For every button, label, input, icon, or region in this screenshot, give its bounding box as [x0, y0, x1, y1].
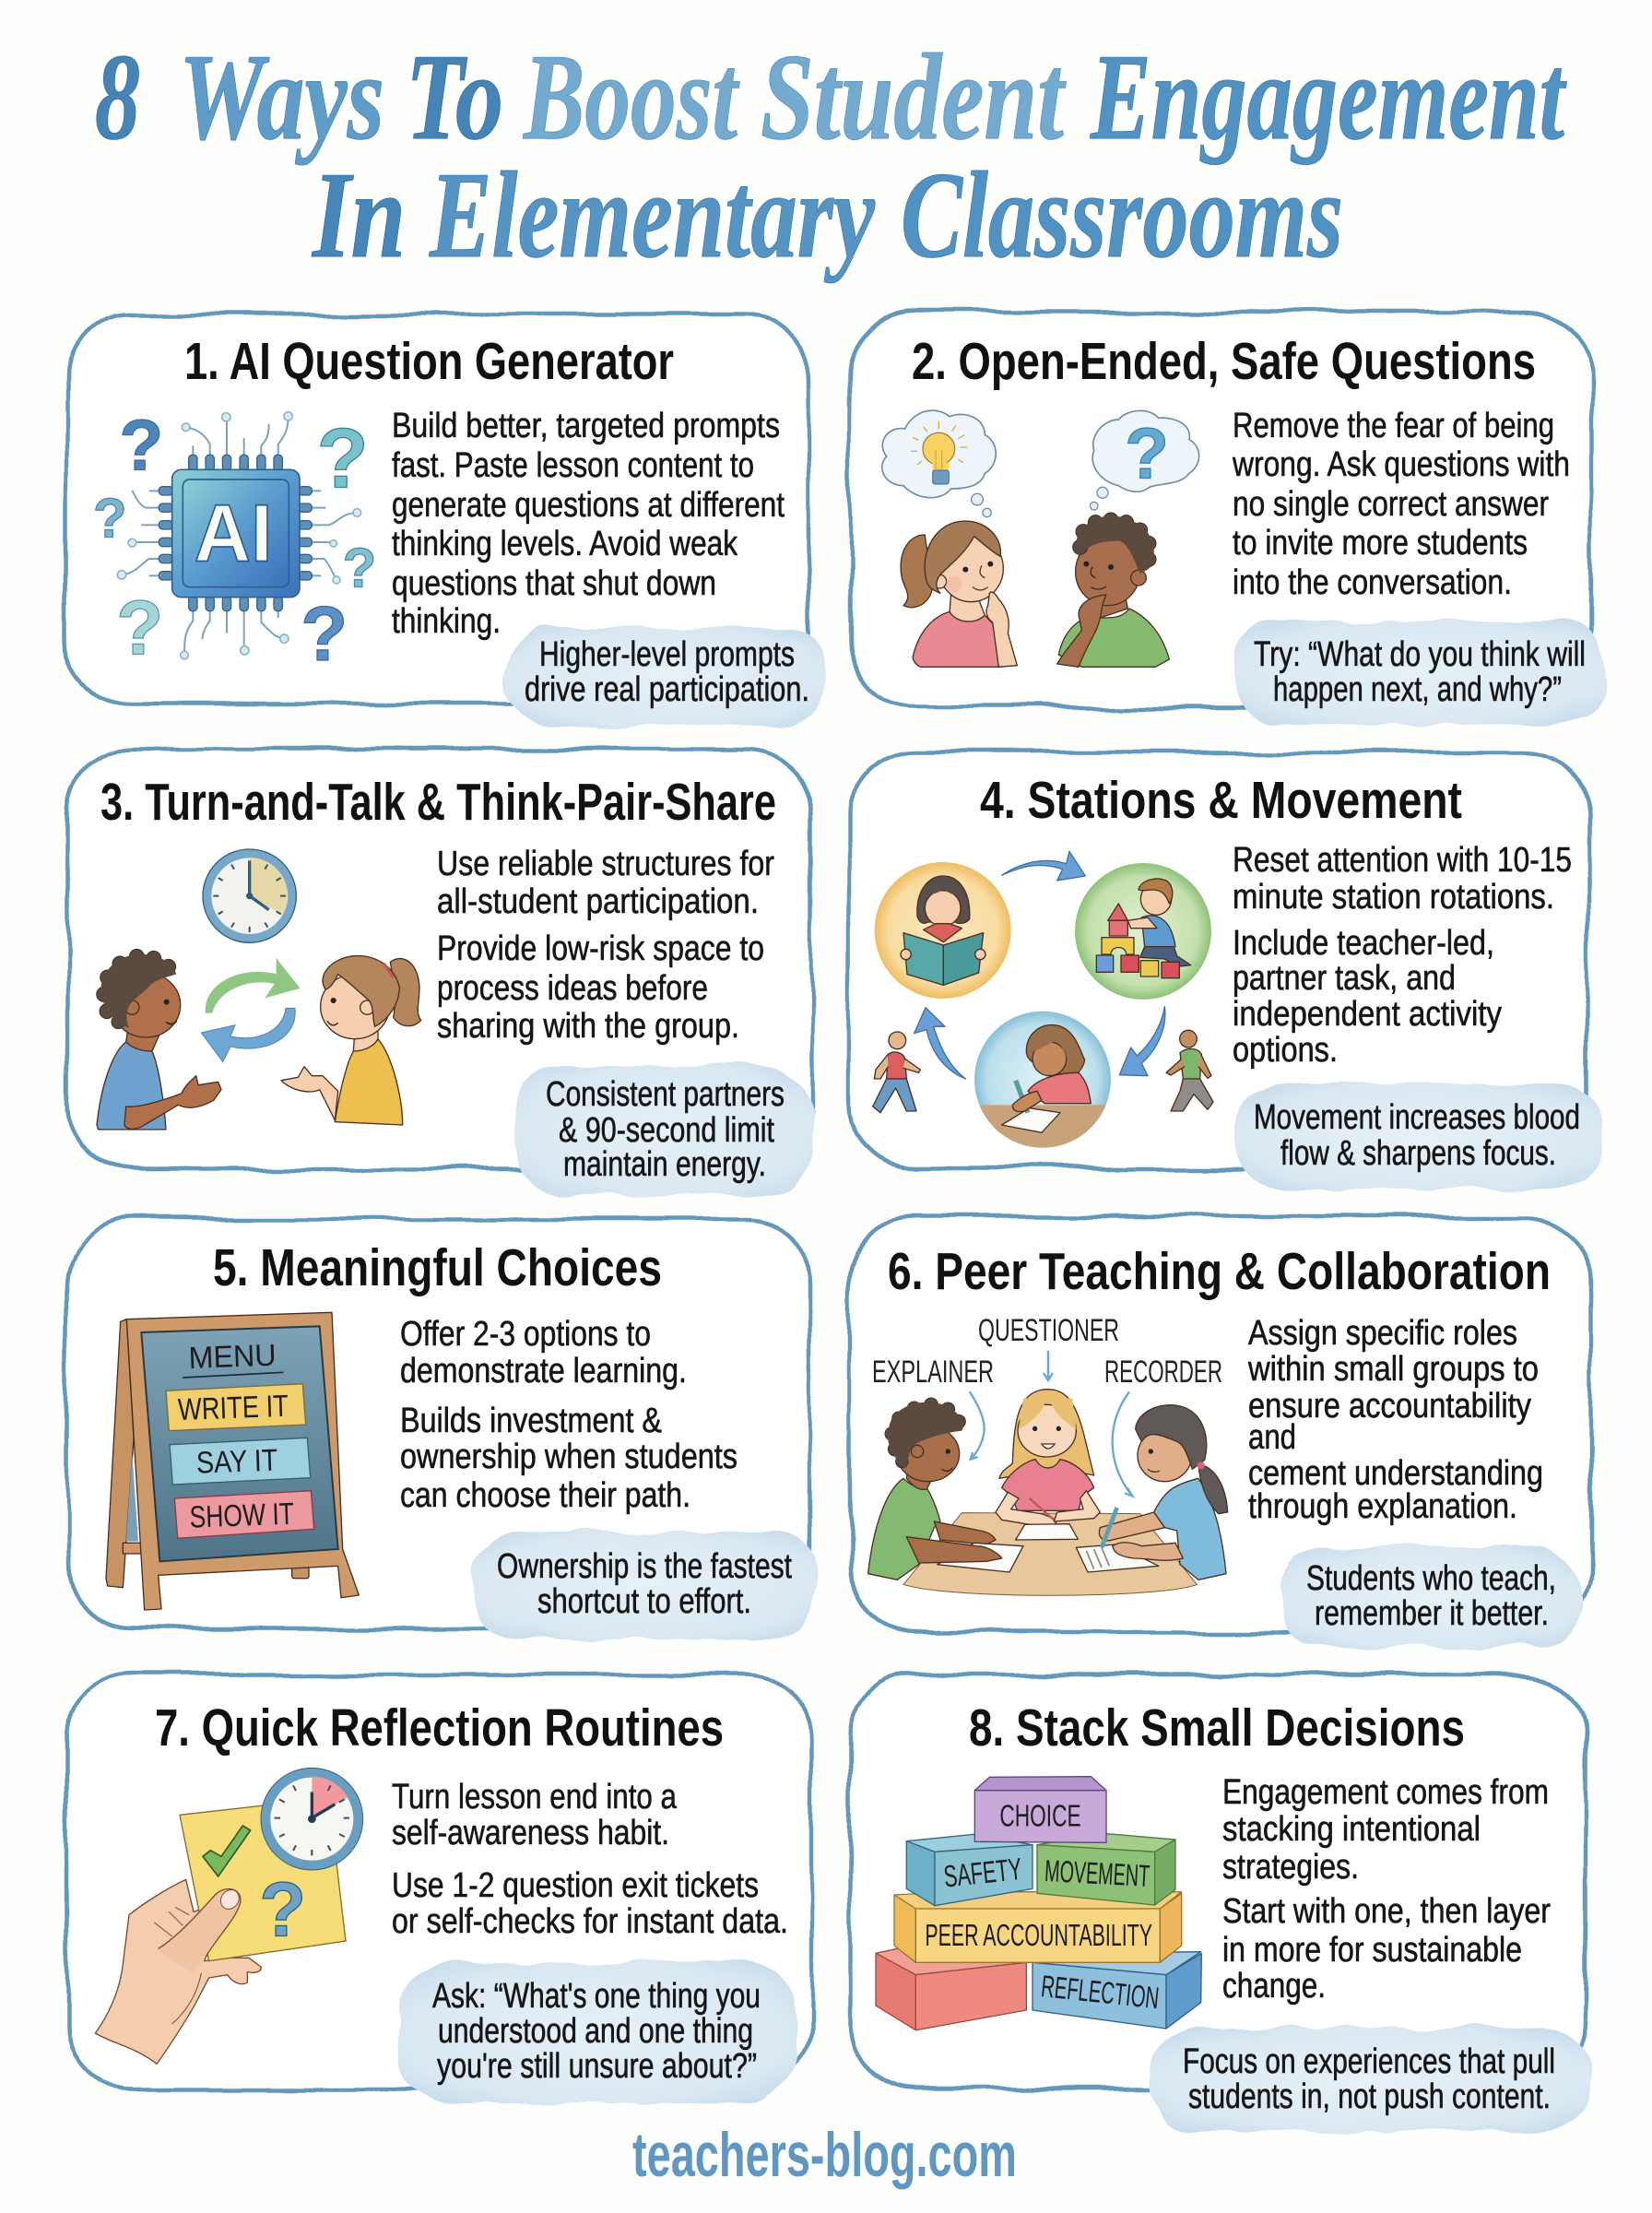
- icon: three students at a table: [868, 1390, 1228, 1595]
- body text: within small groups to: [1247, 1350, 1539, 1389]
- heading: 4. Stations & Movement: [980, 771, 1462, 830]
- icon: clock and two students talking: [97, 849, 421, 1130]
- body text: stacking intentional: [1222, 1810, 1481, 1849]
- body text: [1233, 841, 1572, 1070]
- icon: stacked strategy blocks: CHOICE: [999, 1800, 1081, 1834]
- body text: thinking.: [392, 602, 501, 641]
- callout: Ask: “What's one thing you: [432, 1977, 761, 2016]
- body text: thinking levels. Avoid weak: [392, 525, 738, 563]
- icon: menu easel: MENU: [188, 1339, 277, 1376]
- icon: hand holding exit ticket with timer: ?: [259, 1866, 306, 1952]
- icon: menu easel: SHOW IT: [189, 1497, 295, 1535]
- callout: shortcut to effort.: [537, 1582, 751, 1621]
- callout: flow & sharpens focus.: [1280, 1134, 1556, 1173]
- body text: ownership when students: [400, 1438, 738, 1476]
- body text: minute station rotations.: [1233, 878, 1554, 917]
- body text: no single correct answer: [1233, 485, 1549, 524]
- icon: AI chip with question marks: [93, 404, 376, 677]
- callout: & 90-second limit: [559, 1111, 774, 1150]
- callout: [514, 1065, 813, 1196]
- title: To: [406, 29, 503, 165]
- icon: menu easel: WRITE IT: [177, 1390, 289, 1427]
- heading: 5. Meaningful Choices: [213, 1238, 662, 1297]
- callout: maintain energy.: [563, 1145, 766, 1184]
- icon: AI chip with question marks: ?: [116, 585, 163, 670]
- panel: 6 Peer Teaching & Collaboration: [850, 1217, 1591, 1647]
- body text: sharing with the group.: [437, 1007, 739, 1046]
- body text: [1232, 407, 1570, 602]
- body text: partner task, and: [1233, 959, 1456, 998]
- heading: 7. Quick Reflection Routines: [155, 1698, 724, 1757]
- body text: process ideas before: [437, 969, 708, 1008]
- body text: options.: [1233, 1031, 1338, 1070]
- callout: drive real participation.: [525, 670, 809, 709]
- callout: Higher-level prompts: [539, 635, 795, 674]
- body text: Engagement comes from: [1222, 1773, 1549, 1812]
- icon: menu easel: [106, 1312, 359, 1610]
- heading: 8. Stack Small Decisions: [969, 1698, 1465, 1757]
- body text: [400, 1315, 738, 1515]
- role labels: QUESTIONER: [978, 1313, 1119, 1348]
- role labels: RECORDER: [1104, 1355, 1222, 1390]
- body text: questions that shut down: [392, 564, 716, 603]
- role labels: [872, 1313, 1222, 1390]
- body text: self-awareness habit.: [392, 1814, 669, 1852]
- callout: understood and one thing: [438, 2012, 753, 2051]
- icon: AI chip with question marks: ?: [301, 591, 348, 677]
- panel: 5 Meaningful Choices: [67, 1219, 817, 1639]
- callout: happen next, and why?”: [1273, 670, 1562, 709]
- body text: or self-checks for instant data.: [392, 1902, 788, 1941]
- body text: can choose their path.: [400, 1476, 690, 1515]
- body text: and: [1248, 1418, 1296, 1457]
- callout: [474, 1532, 817, 1639]
- callout: [1234, 621, 1607, 725]
- icon: stacked strategy blocks: PEER ACCOUNTABILITY: [925, 1919, 1152, 1953]
- heading: 3. Turn-and-Talk & Think-Pair-Share: [100, 773, 776, 832]
- body text: Remove the fear of being: [1233, 407, 1554, 445]
- callout: you're still unsure about?”: [437, 2047, 757, 2086]
- body text: strategies.: [1222, 1848, 1359, 1887]
- body text: generate questions at different: [392, 486, 785, 525]
- body text: [392, 407, 785, 641]
- body text: Reset attention with 10-15: [1233, 841, 1572, 880]
- icon: stacked strategy blocks: REFLECTION: [1039, 1970, 1161, 2016]
- body text: wrong. Ask questions with: [1232, 445, 1570, 484]
- panel: 7 Quick Reflection Routines: [67, 1675, 811, 2103]
- body text: Start with one, then layer: [1222, 1892, 1551, 1931]
- icon: stacked strategy blocks: MOVEMENT: [1044, 1854, 1150, 1894]
- footer: website: teachers-blog.com: [632, 2120, 1017, 2190]
- body text: Assign specific roles: [1248, 1314, 1517, 1353]
- body text: Provide low-risk space to: [437, 929, 764, 968]
- icon: two students thinking: ?: [1125, 412, 1169, 493]
- body text: [437, 845, 774, 1046]
- icon: menu easel: SAY IT: [195, 1444, 278, 1481]
- body text: [1247, 1314, 1543, 1526]
- body text: Use 1-2 question exit tickets: [392, 1866, 759, 1905]
- body text: ensure accountability: [1248, 1387, 1531, 1426]
- panel: 8 Stack Small Decisions: [850, 1675, 1591, 2132]
- body text: in more for sustainable: [1222, 1931, 1522, 1970]
- arrow: questioner: [1044, 1351, 1053, 1380]
- icon: two students thinking: [882, 410, 1199, 667]
- body text: change.: [1222, 1967, 1326, 2006]
- body text: to invite more students: [1233, 524, 1528, 562]
- icon: three learning stations with arrows: [873, 851, 1213, 1148]
- body text: through explanation.: [1248, 1487, 1517, 1526]
- panel: 2 Open-Ended, Safe Questions: [850, 312, 1607, 725]
- body text: cement understanding: [1248, 1454, 1543, 1493]
- callout: Consistent partners: [546, 1075, 785, 1114]
- icon: stacked strategy blocks: [876, 1777, 1201, 2030]
- icon: AI chip with question marks: ?: [317, 411, 369, 505]
- icon: stacked strategy blocks: SAFETY: [942, 1852, 1023, 1895]
- body text: Build better, targeted prompts: [392, 407, 780, 445]
- icon: AI chip with question marks: ?: [119, 404, 163, 485]
- body text: [1222, 1773, 1551, 2006]
- body text: Offer 2-3 options to: [400, 1315, 651, 1354]
- callout: Ownership is the fastest: [497, 1547, 792, 1586]
- title: [95, 29, 1567, 283]
- callout: [506, 628, 827, 727]
- title: In: [311, 147, 406, 283]
- icon: hand holding exit ticket with timer: [95, 1768, 363, 2064]
- body text: into the conversation.: [1233, 563, 1512, 602]
- panel: 1 AI Question Generator: [66, 314, 827, 727]
- title: Classrooms: [901, 147, 1343, 283]
- body text: Builds investment &: [400, 1402, 662, 1440]
- body text: Use reliable structures for: [437, 845, 774, 883]
- body text: demonstrate learning.: [400, 1352, 687, 1391]
- body text: fast. Paste lesson content to: [392, 446, 754, 485]
- callout: [398, 1962, 796, 2103]
- panel: 3 Turn-and-Talk & Think-Pair-Share: [67, 749, 813, 1196]
- callout: students in, not push content.: [1188, 2077, 1551, 2116]
- icon: AI chip with question marks: ?: [343, 538, 376, 599]
- body text: independent activity: [1233, 995, 1502, 1034]
- body text: Turn lesson end into a: [392, 1778, 678, 1817]
- callout: Focus on experiences that pull: [1183, 2042, 1555, 2081]
- panel: 4 Stations & Movement: [850, 751, 1603, 1189]
- callout: [1280, 1546, 1580, 1647]
- heading: 1. AI Question Generator: [184, 332, 674, 391]
- callout: [1150, 2028, 1591, 2132]
- title: 8: [95, 29, 140, 165]
- title: Student: [761, 29, 1067, 165]
- body text: [392, 1778, 788, 1941]
- body text: all-student participation.: [437, 882, 759, 921]
- title: Boost: [523, 29, 740, 165]
- title: Elementary: [429, 147, 875, 283]
- title: Ways: [179, 29, 384, 165]
- callout: [1234, 1083, 1603, 1189]
- callout: remember it better.: [1315, 1594, 1549, 1633]
- icon: AI chip with question marks: AI: [195, 487, 273, 578]
- callout: Students who teach,: [1306, 1559, 1556, 1598]
- body text: Include teacher-led,: [1233, 924, 1494, 963]
- role labels: EXPLAINER: [872, 1355, 994, 1390]
- icon: AI chip with question marks: ?: [93, 488, 127, 550]
